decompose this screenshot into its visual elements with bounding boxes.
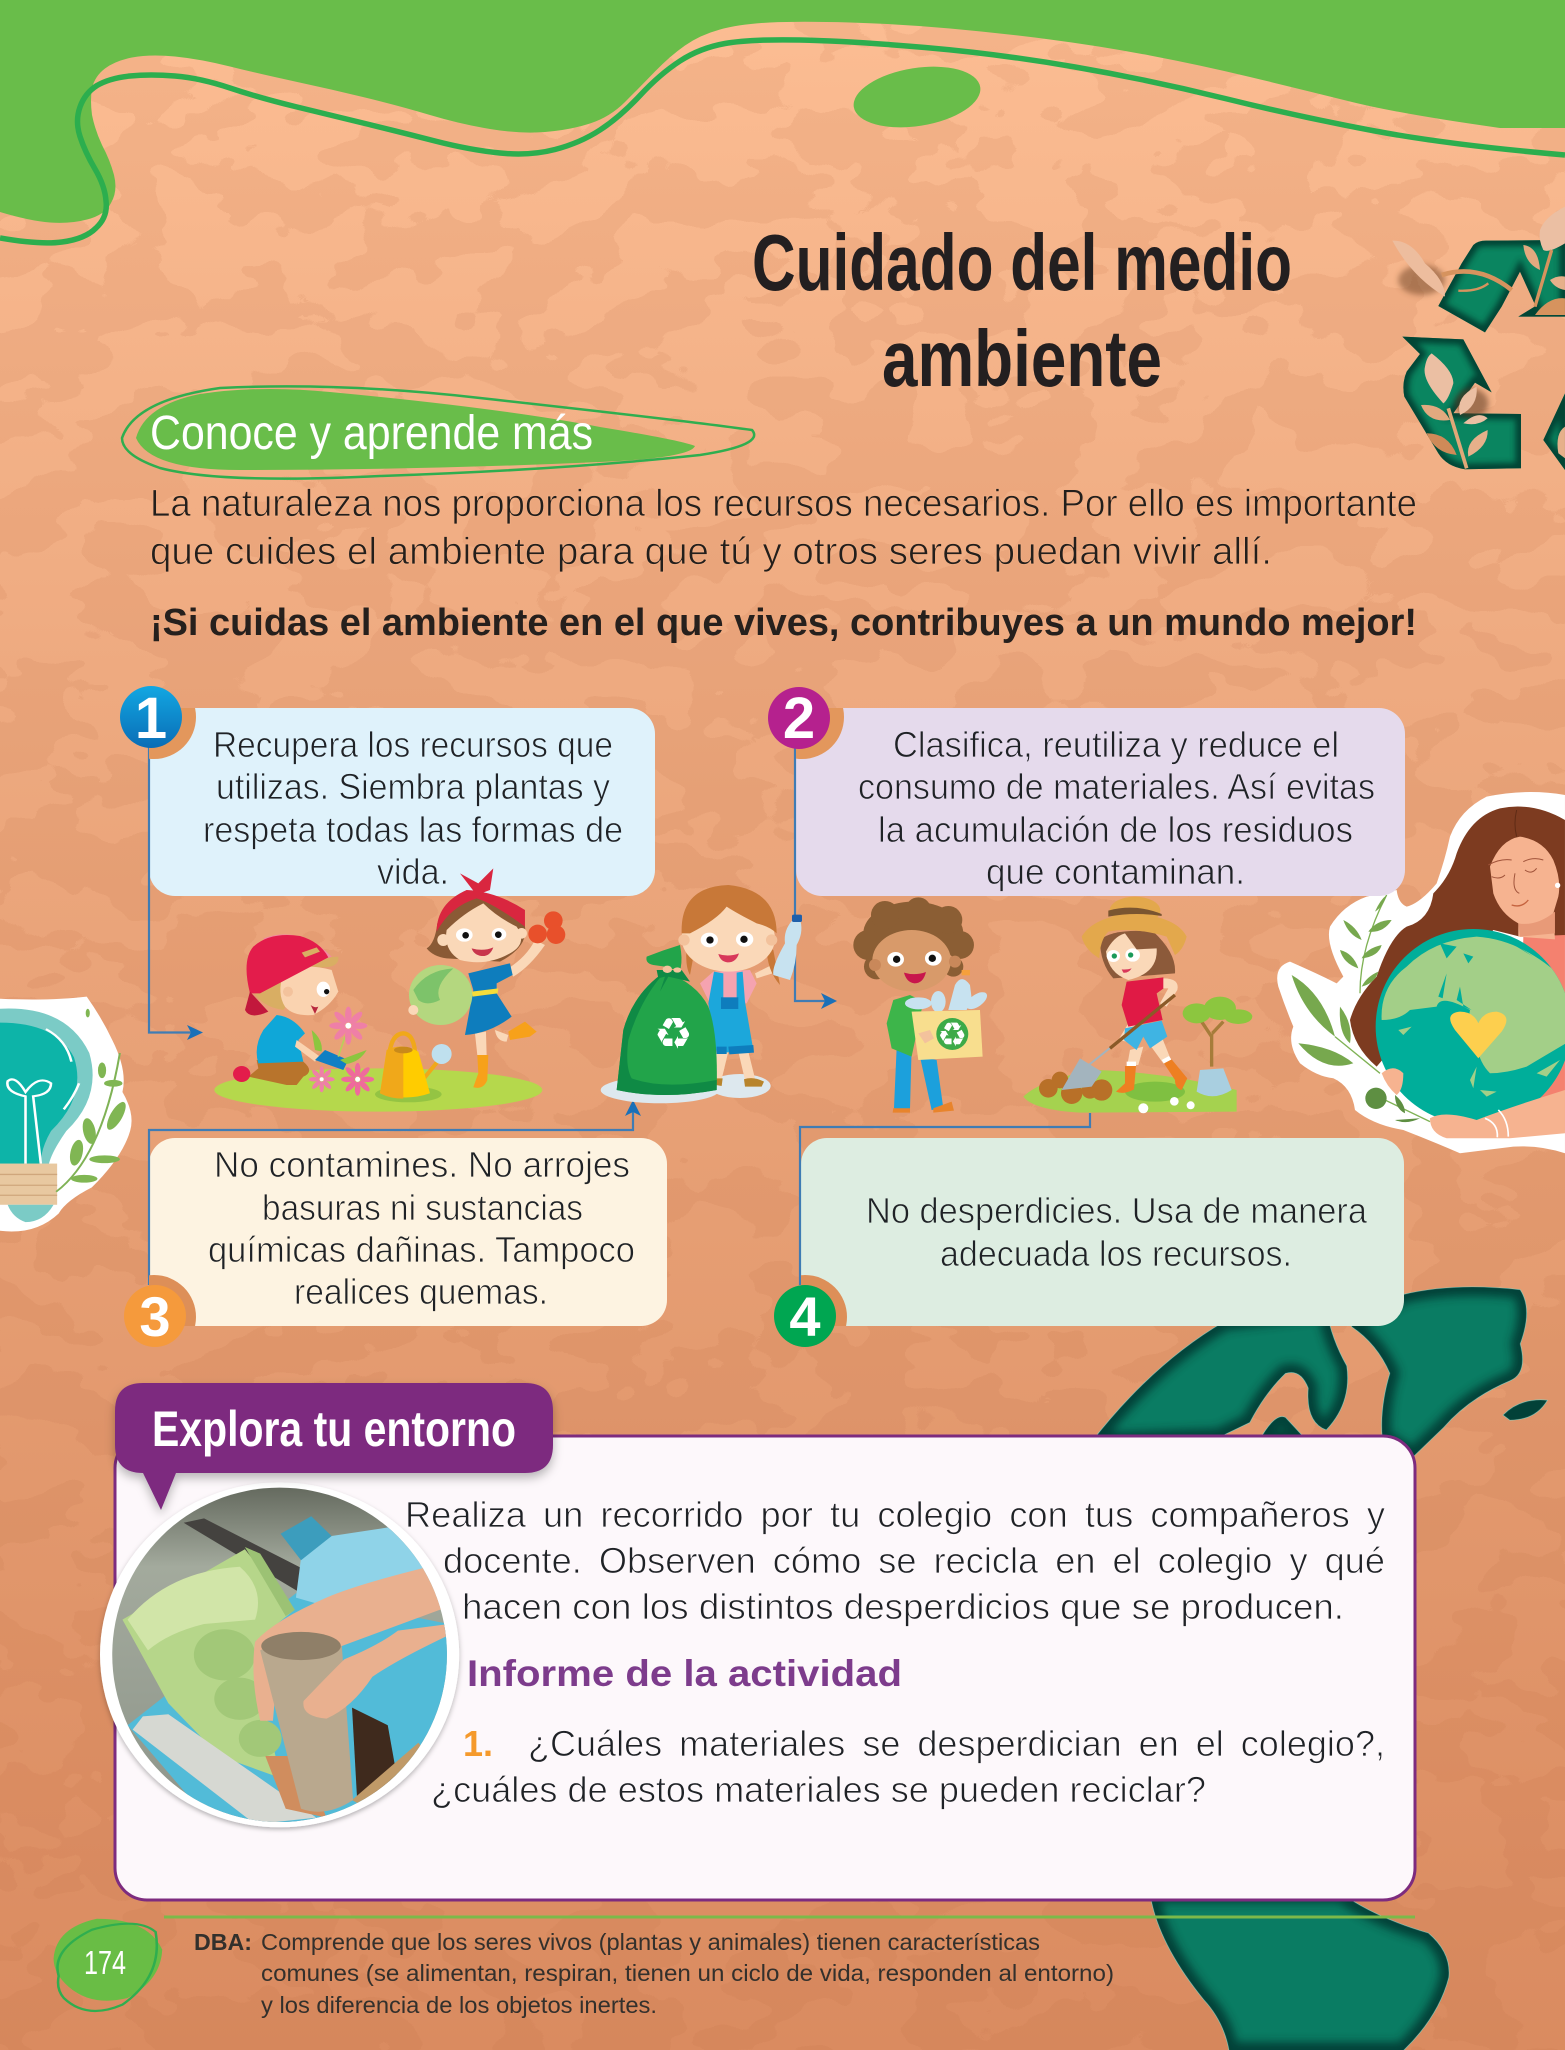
badge: number 2: 2: [783, 686, 815, 751]
title: [752, 218, 1292, 403]
footer DBA text: [194, 1929, 1114, 2018]
question 1: 1.: [463, 1723, 493, 1764]
illustration: girl with recycling bag: ♻: [654, 1009, 693, 1059]
illustration: girl planting a tree: [1023, 897, 1252, 1113]
title: ambiente: [882, 314, 1162, 403]
badge: number 4: [774, 1275, 847, 1347]
badge: number 3: 3: [139, 1285, 171, 1348]
activity paragraph: [405, 1494, 1385, 1627]
icon: dark green map cut-out: [1092, 1287, 1547, 2050]
step 3 text: basuras ni sustancias: [262, 1187, 583, 1228]
question 1: [431, 1723, 1385, 1810]
badge: number 3: [124, 1275, 196, 1347]
connector: step 4 line: [800, 1113, 1090, 1285]
badge: number 1: [120, 686, 196, 759]
step 4 text: No desperdicies. Usa de manera: [866, 1190, 1368, 1231]
activity paragraph: hacen con los distintos desperdicios que se producen.: [462, 1586, 1344, 1627]
badge: number 2: [768, 687, 844, 759]
panel: step 4 do not waste: [801, 1138, 1404, 1326]
step 2 text: que contaminan.: [986, 851, 1245, 892]
intro text: [150, 483, 1417, 573]
footer DBA text: Comprende que los seres vivos (plantas y animales) tienen características: [261, 1929, 1040, 1955]
step 3 text: No contamines. No arrojes: [214, 1144, 630, 1185]
step 2 text: Clasifica, reutiliza y reduce el: [893, 724, 1339, 765]
badge: number 1: 1: [135, 686, 167, 751]
page number: 174: [84, 1944, 126, 1981]
activity paragraph: Realiza un recorrido por tu colegio con tus compañeros y: [405, 1494, 1385, 1535]
panel: step 3 do not pollute: [149, 1138, 667, 1326]
question 1: ¿cuáles de estos materiales se pueden reciclar?: [431, 1769, 1206, 1810]
footer DBA text: DBA:: [194, 1929, 252, 1955]
step 4 text: [866, 1190, 1368, 1274]
heading tab: Explora tu entorno: [115, 1383, 553, 1510]
step 2 text: la acumulación de los residuos: [878, 809, 1353, 850]
footer DBA text: comunes (se alimentan, respiran, tienen un ciclo de vida, responden al entorno): [261, 1960, 1114, 1986]
top green wave: [0, 0, 1565, 243]
icon: light bulb sticker: [0, 997, 132, 1232]
connector: step 1 arrow: [149, 745, 203, 1040]
illustration: boy and girl gardening: [214, 868, 565, 1112]
step 4 text: adecuada los recursos.: [940, 1233, 1292, 1274]
heading: Conoce y aprende más: [122, 386, 754, 479]
heading: Informe de la actividad: Informe de la actividad: [467, 1653, 902, 1694]
step 1 text: vida.: [377, 851, 449, 892]
connector: step 2 arrow: [795, 745, 837, 1009]
panel: step 2 classify and reuse: [796, 708, 1405, 896]
activity paragraph: docente. Observen cómo se recicla en el colegio y qué: [443, 1540, 1385, 1581]
heading: Conoce y aprende más: Conoce y aprende más: [150, 407, 593, 460]
intro text: La naturaleza nos proporciona los recursos necesarios. Por ello es importante: [150, 483, 1417, 525]
step 1 text: utilizas. Siembra plantas y: [216, 766, 610, 807]
step 1 text: [203, 724, 623, 892]
step 1 text: respeta todas las formas de: [203, 809, 623, 850]
step 1 text: Recupera los recursos que: [213, 724, 613, 765]
divider line: [164, 1916, 1415, 1918]
heading tab: Explora tu entorno: Explora tu entorno: [152, 1401, 516, 1457]
illustration: girl with recycling bag: [601, 885, 990, 1113]
step 2 text: [858, 724, 1375, 892]
panel: Explora tu entorno: [115, 1436, 1415, 1900]
intro text: que cuides el ambiente para que tú y otros seres puedan vivir allí.: [150, 531, 1272, 573]
title: Cuidado del medio: [752, 218, 1292, 307]
step 2 text: consumo de materiales. Así evitas: [858, 766, 1375, 807]
photo: recycled materials in a bin: [100, 1479, 459, 1831]
connector: step 3 arrow: [149, 1100, 641, 1285]
question 1: ¿Cuáles materiales se desperdician en el colegio?,: [528, 1723, 1385, 1764]
footer DBA text: y los diferencia de los objetos inertes.: [261, 1992, 657, 2018]
step 3 text: [208, 1144, 635, 1312]
badge: number 4: 4: [789, 1285, 821, 1348]
highlighted sentence: ¡Si cuidas el ambiente en el que vives, contribuyes a un mundo mejor!: [150, 602, 1417, 644]
panel: step 1 recover resources: [149, 708, 655, 896]
step 3 text: químicas dañinas. Tampoco: [208, 1229, 635, 1270]
icon: paper-cut recycling symbol: [1392, 207, 1565, 470]
icon: woman holding the globe sticker: [1277, 792, 1565, 1153]
step 3 text: realices quemas.: [294, 1271, 548, 1312]
illustration: girl with recycling bag: ♻: [937, 1015, 967, 1054]
page number: [54, 1919, 162, 2011]
